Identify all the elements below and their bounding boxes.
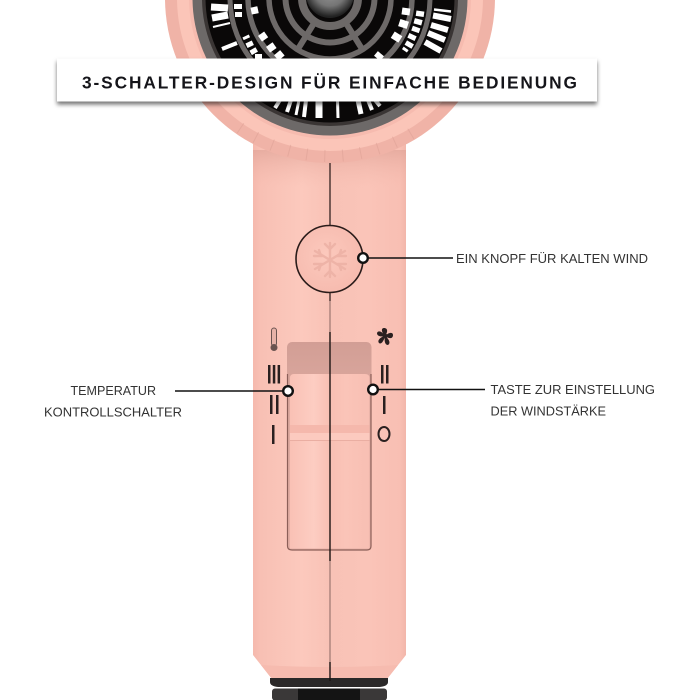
callout: cold wind button [358,252,648,266]
mark I [383,396,386,414]
grille rings [230,0,430,98]
fan blades [211,4,451,118]
title banner [57,58,597,102]
mark II [381,365,388,384]
cold wind button [296,226,363,292]
icon: snowflake [314,243,346,277]
title banner: 3-SCHALTER-DESIGN FÜR EINFACHE BEDIENUNG [82,72,577,92]
callout: wind strength switch: DER WINDSTÄRKE [490,404,606,418]
temperature switch recess [287,332,372,561]
fan speed scale [377,328,393,441]
mark III [268,365,280,384]
callout: temperature switch: TEMPERATUR [70,384,156,398]
fan grille [192,0,468,136]
callout: temperature switch [44,384,293,420]
mark I [272,425,274,444]
callout: cold wind button: EIN KNOPF FÜR KALTEN WIND [456,252,648,266]
callout: wind strength switch [368,383,655,418]
seam line [329,163,331,681]
hair dryer [165,0,495,700]
dryer nozzle base [270,678,388,700]
mark II [270,395,278,414]
dryer handle [253,130,406,679]
mark O [378,427,390,441]
icon: fan [377,328,393,345]
grille hub [306,0,354,18]
callout: temperature switch: KONTROLLSCHALTER [44,406,182,420]
dryer head [165,0,495,163]
temperature scale [268,328,280,444]
icon: thermometer [270,328,278,351]
slider [290,374,370,548]
callout: wind strength switch: TASTE ZUR EINSTELLUNG [490,383,655,397]
